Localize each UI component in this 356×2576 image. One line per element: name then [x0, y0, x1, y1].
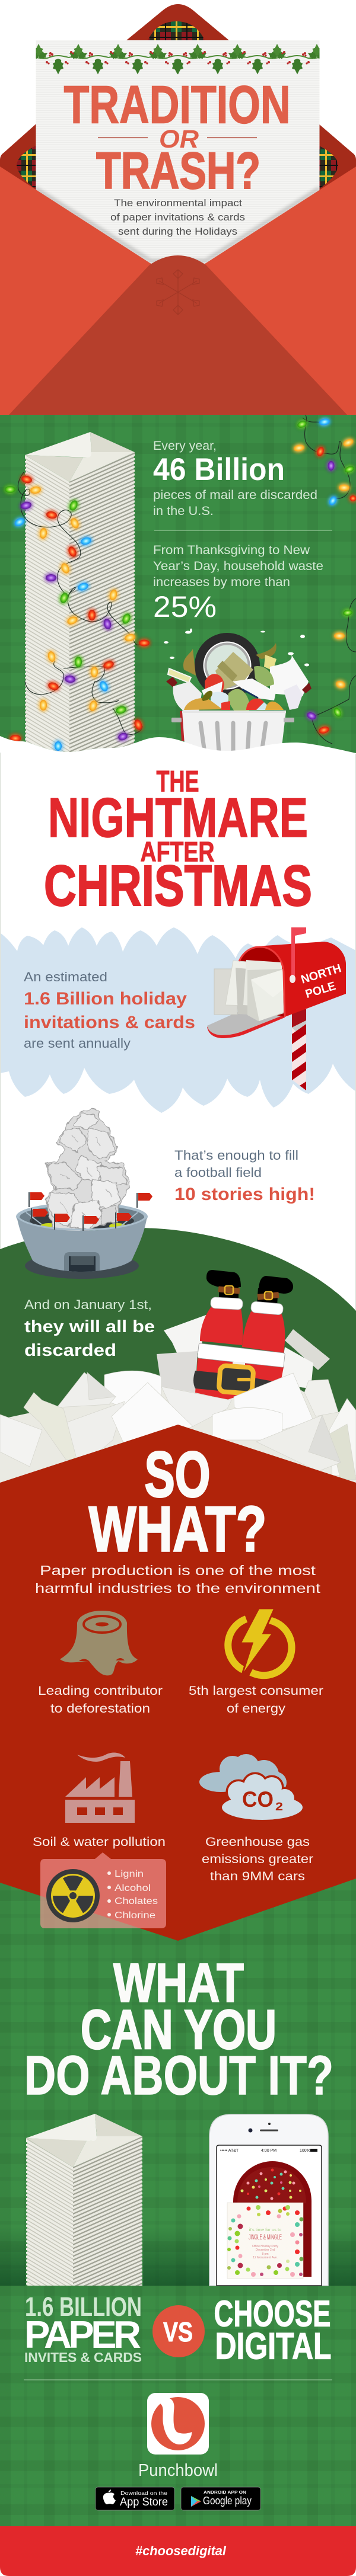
text: 25 percent: Year’s Day, household waste: [153, 559, 323, 573]
icon: radiation: [46, 1869, 100, 1922]
phone: [209, 2114, 328, 2286]
text: deforestation: Leading contributor: [38, 1684, 163, 1698]
text: 25 percent: [153, 543, 323, 623]
heading: [89, 1439, 267, 1566]
icon: co2 cloud: [199, 1754, 303, 1820]
pollutant list: Chlorine: [115, 1911, 155, 1921]
pollutant list: Alcohol: [115, 1883, 151, 1893]
subtitle: of paper invitations & cards: [110, 212, 245, 223]
button: google play: [181, 2487, 260, 2510]
text: 46 billion: pieces of mail are discarded: [153, 488, 317, 502]
pollutant list: [107, 1869, 158, 1921]
text: 1.6 billion: invitations & cards: [24, 1013, 195, 1032]
text: 1.6 billion: [24, 969, 195, 1051]
icon: energy bolt: [228, 1608, 292, 1676]
stadium with paper pile: [16, 1109, 152, 1279]
heading: CAN YOU: [81, 1998, 276, 2060]
flies: [164, 628, 309, 666]
text: football field: a football field: [174, 1165, 262, 1180]
panel: what can you do: [0, 1952, 356, 2510]
comparison: vs badge: VS: [163, 2316, 193, 2347]
page edge strips: [1, 753, 355, 1310]
button: google play: Google play: [203, 2495, 252, 2507]
envelope liner dots: [241, 2169, 301, 2200]
pollutant list: Lignin: [115, 1869, 144, 1879]
panel: nightmare after christmas: [0, 736, 356, 1256]
flag: [291, 927, 306, 978]
comparison: paper: 1.6 BILLION: [25, 2292, 142, 2322]
text: energy: [189, 1684, 323, 1716]
icon: co2 cloud: 2: [275, 1801, 283, 1813]
text: 1.6 billion: 1.6 Billion holiday: [24, 989, 187, 1009]
christmas lights: [5, 415, 356, 751]
blue scalloped band: [0, 927, 356, 1113]
heading: AFTER: [140, 836, 215, 868]
phone invite card: [227, 2203, 304, 2279]
holly garland left: [36, 43, 178, 78]
card dots: [227, 2205, 304, 2277]
divider: [154, 530, 332, 531]
invitation card: [36, 40, 319, 271]
candy cane post: [292, 1009, 306, 1090]
envelope side flaps: [0, 123, 356, 201]
text: football field: 10 stories high!: [174, 1185, 315, 1204]
panel: green waste section: [0, 415, 356, 761]
snow drift: [0, 736, 356, 1256]
text: greenhouse: [202, 1835, 313, 1883]
status bar: 4:00 PM: [261, 2149, 276, 2153]
envelope back flap: [126, 4, 229, 40]
title: or: OR: [159, 125, 199, 153]
envelope front flap: [9, 255, 347, 415]
paper stack: [25, 432, 135, 761]
panel: bottom green plaid: [0, 1873, 356, 2530]
text: 46 billion: in the U.S.: [153, 504, 214, 518]
title: trash: TRASH?: [96, 142, 260, 200]
status bar: ••••• AT&T: [220, 2149, 239, 2153]
plaid liner sides: [17, 145, 338, 190]
text: greenhouse: Greenhouse gas: [205, 1835, 310, 1849]
text: 46 billion: [153, 439, 317, 518]
text: 25 percent: increases by more than: [153, 575, 290, 589]
intro text: harmful industries to the environment: [35, 1580, 321, 1596]
status bar: 100%: [300, 2149, 310, 2153]
card text: Office Holiday Party: [252, 2245, 279, 2248]
paper pile back: [0, 1314, 356, 1487]
text: discarded: they will all be: [24, 1317, 155, 1336]
mailbox label: [300, 962, 343, 1001]
heading: THE: [157, 764, 199, 798]
paper stack small: [26, 2114, 142, 2286]
panel: so what: [0, 1425, 356, 1941]
plaid liner top: [148, 21, 205, 40]
callout: pollutants: [40, 1852, 166, 1928]
text: 46 billion: Every year,: [153, 439, 217, 453]
heading: WHAT: [113, 1952, 244, 2014]
heading: [24, 1952, 333, 2106]
text: deforestation: to deforestation: [50, 1702, 150, 1716]
divider: [24, 2379, 332, 2380]
button: app store: App Store: [120, 2496, 168, 2508]
comparison: vs badge: [152, 2305, 205, 2357]
comparison: digital: [214, 2293, 331, 2367]
text: discarded: And on January 1st,: [24, 1297, 152, 1312]
mailbox label: POLE: [304, 980, 337, 1001]
icon: tree stump: [60, 1611, 138, 1675]
card text: 8 pm: [262, 2252, 269, 2256]
hashtag: #choosedigital: [135, 2543, 227, 2558]
comparison: paper: [24, 2292, 142, 2365]
heading: SO: [145, 1439, 210, 1511]
panel: discarded hill: [0, 1109, 356, 1493]
intro text: [35, 1563, 321, 1596]
envelopes in mailbox: [214, 960, 284, 1021]
text: deforestation: [38, 1684, 163, 1716]
shadow gradient: [0, 2226, 356, 2286]
button: google play: ANDROID APP ON: [204, 2489, 246, 2495]
text: energy: of energy: [227, 1702, 286, 1716]
card text: it’s time for us to: [249, 2227, 281, 2232]
comparison: paper: INVITES & CARDS: [24, 2350, 142, 2365]
snowflake emboss: [157, 270, 199, 315]
text: 25 percent: 25%: [153, 590, 217, 623]
trash can and garbage: [166, 638, 312, 761]
stadium flags: [29, 1192, 152, 1231]
heading: [44, 764, 312, 918]
santa legs: [193, 1270, 293, 1400]
card text: December 2nd: [256, 2248, 275, 2252]
button: app store: Download on the: [120, 2490, 167, 2496]
panel: footer: [0, 2526, 356, 2576]
subtitle: [110, 197, 245, 237]
text: greenhouse: than 9MM cars: [210, 1870, 305, 1883]
pocket shadow: [36, 188, 319, 261]
icon: punchbowl app: [147, 2393, 209, 2455]
paper pile front: [0, 1371, 356, 1480]
envelope pocket: [0, 167, 356, 415]
text: 25 percent: From Thanksgiving to New: [153, 543, 310, 557]
card text: JINGLE & MINGLE: [249, 2233, 282, 2241]
divider rules: [98, 137, 257, 139]
text: football field: [174, 1148, 315, 1204]
card text: [249, 2227, 282, 2260]
brand name: Punchbowl: [138, 2461, 218, 2480]
text: 1.6 billion: An estimated: [24, 969, 107, 984]
text: pollution: Soil & water pollution: [33, 1835, 166, 1849]
text: football field: That’s enough to fill: [174, 1148, 298, 1163]
title: tradition: TRADITION: [64, 76, 291, 135]
mailbox label: NORTH: [300, 962, 343, 987]
text: 1.6 billion: are sent annually: [24, 1036, 131, 1051]
text: discarded: discarded: [24, 1341, 116, 1360]
pollutant list: Cholates: [115, 1896, 158, 1906]
status bar: [220, 2149, 317, 2153]
subtitle: sent during the Holidays: [118, 226, 237, 237]
mailbox: [207, 927, 346, 1090]
button: app store: [96, 2487, 174, 2510]
text: 46 billion: 46 Billion: [153, 452, 285, 487]
panel: envelope hero: [0, 0, 356, 415]
co2 label: CO: [242, 1787, 274, 1812]
holly garland right: [177, 43, 319, 78]
card text: 12 Monument Ave.: [253, 2256, 278, 2260]
text: energy: 5th largest consumer: [189, 1684, 323, 1698]
phone envelope: [233, 2161, 312, 2277]
subtitle: The environmental impact: [114, 197, 242, 209]
text: greenhouse: emissions greater: [202, 1852, 313, 1866]
icon: factory: [65, 1753, 135, 1823]
heading: WHAT?: [89, 1493, 267, 1566]
intro text: Paper production is one of the most: [40, 1563, 316, 1578]
comparison: paper: PAPER: [24, 2313, 141, 2356]
crumpled paper pile: [46, 1109, 129, 1231]
text: discarded: [24, 1297, 155, 1360]
